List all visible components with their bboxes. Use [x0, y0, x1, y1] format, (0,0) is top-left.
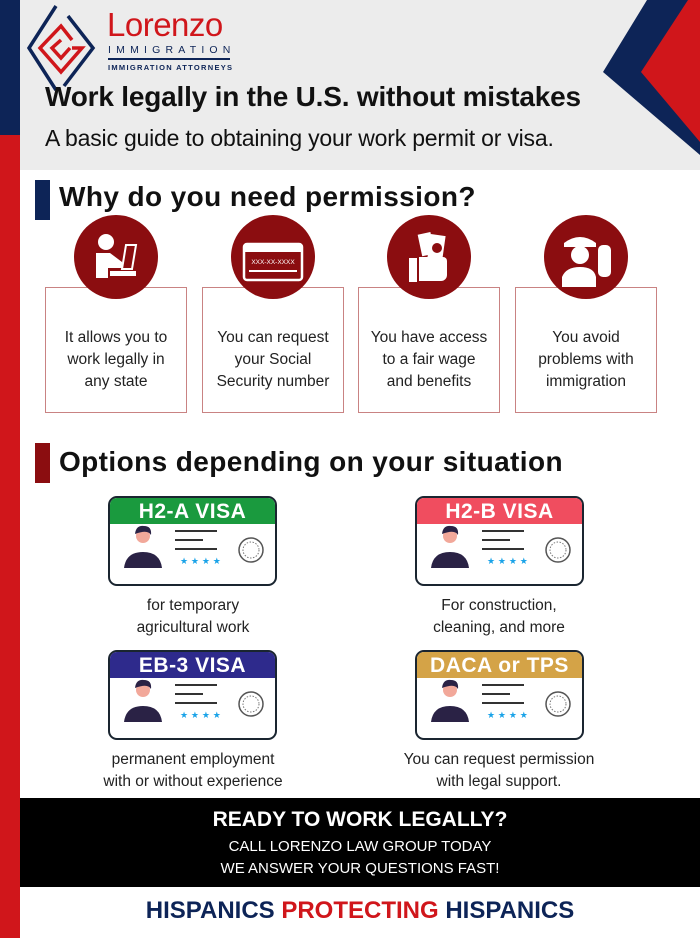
icon: social security card: XXX-XX-XXXX [251, 259, 295, 266]
panel: benefit 4 [515, 215, 657, 413]
visa card: H2-B: cleaning, and more [433, 619, 565, 636]
panel: benefit 1 [45, 215, 187, 413]
visa card: EB-3 [103, 650, 283, 790]
visa card: DACA or TPS: with legal support. [437, 773, 561, 790]
call to action band: CALL LORENZO LAW GROUP TODAY [229, 838, 491, 855]
icon: hand with money [387, 215, 471, 299]
icon: officer stop hand [544, 215, 628, 299]
visa card: H2-A: agricultural work [137, 619, 249, 636]
call to action band: WE ANSWER YOUR QUESTIONS FAST! [221, 860, 499, 877]
panel: benefit 2: Security number [217, 373, 329, 390]
icon: social security card [231, 215, 315, 299]
visa card: H2-B [415, 496, 584, 636]
visa card: DACA or TPS: You can request permission [404, 751, 594, 768]
left strip red [0, 135, 20, 938]
panel: benefit 1: any state [85, 373, 147, 390]
panel: benefit 2: You can request [217, 329, 329, 346]
panel: benefit 4: immigration [546, 373, 626, 390]
panel: benefit 3 [358, 215, 500, 413]
panel: benefit 2 [202, 215, 344, 413]
visa card: H2-B: H2-B VISA [445, 500, 554, 523]
panel: benefit 4: problems with [538, 351, 634, 368]
visa card: H2-A: H2-A VISA [139, 500, 246, 523]
icon: person at laptop [74, 215, 158, 299]
call to action band [20, 798, 700, 887]
call to action band: READY TO WORK LEGALLY? [213, 808, 507, 831]
section heading: options: Options depending on your situation [59, 446, 563, 477]
left strip navy [0, 0, 20, 135]
footer slogan: HISPANICS PROTECTING HISPANICS [146, 897, 574, 924]
panel: benefit 1: It allows you to [65, 329, 167, 346]
logo: IMMIGRATION [108, 44, 236, 56]
section heading: why: Why do you need permission? [59, 181, 476, 212]
visa card: EB-3: permanent employment [112, 751, 274, 768]
visa card: DACA or TPS [404, 650, 594, 790]
visa card: H2-A [108, 496, 277, 636]
visa card: H2-B: ★ ★ ★ ★ [487, 557, 528, 567]
visa card: DACA or TPS: ★ ★ ★ ★ [487, 711, 528, 721]
panel: benefit 3: to a fair wage [382, 351, 476, 368]
visa card: EB-3: with or without experience [103, 773, 283, 790]
visa card: H2-A: ★ ★ ★ ★ [180, 557, 221, 567]
panel: benefit 3: You have access [371, 329, 487, 346]
panel: benefit 2: your Social [235, 351, 311, 368]
icon: logo diamond [27, 5, 96, 91]
visa card: DACA or TPS: DACA or TPS [430, 654, 569, 677]
panel: benefit 4: You avoid [552, 329, 620, 346]
logo: IMMIGRATION ATTORNEYS [108, 63, 233, 72]
visa card: H2-B: For construction, [441, 597, 557, 614]
visa card: H2-A: for temporary [147, 597, 239, 614]
visa card: EB-3: EB-3 VISA [139, 654, 246, 677]
top right chevron decoration [603, 0, 700, 155]
panel: benefit 3: and benefits [387, 373, 471, 390]
logo [27, 5, 236, 91]
header background [20, 0, 700, 170]
panel: benefit 1: work legally in [67, 351, 165, 368]
subtitle: A basic guide to obtaining your work permit or visa. [45, 125, 554, 151]
logo text: Lorenzo [107, 6, 223, 43]
title: Work legally in the U.S. without mistakes [45, 81, 581, 112]
visa card: EB-3: ★ ★ ★ ★ [180, 711, 221, 721]
